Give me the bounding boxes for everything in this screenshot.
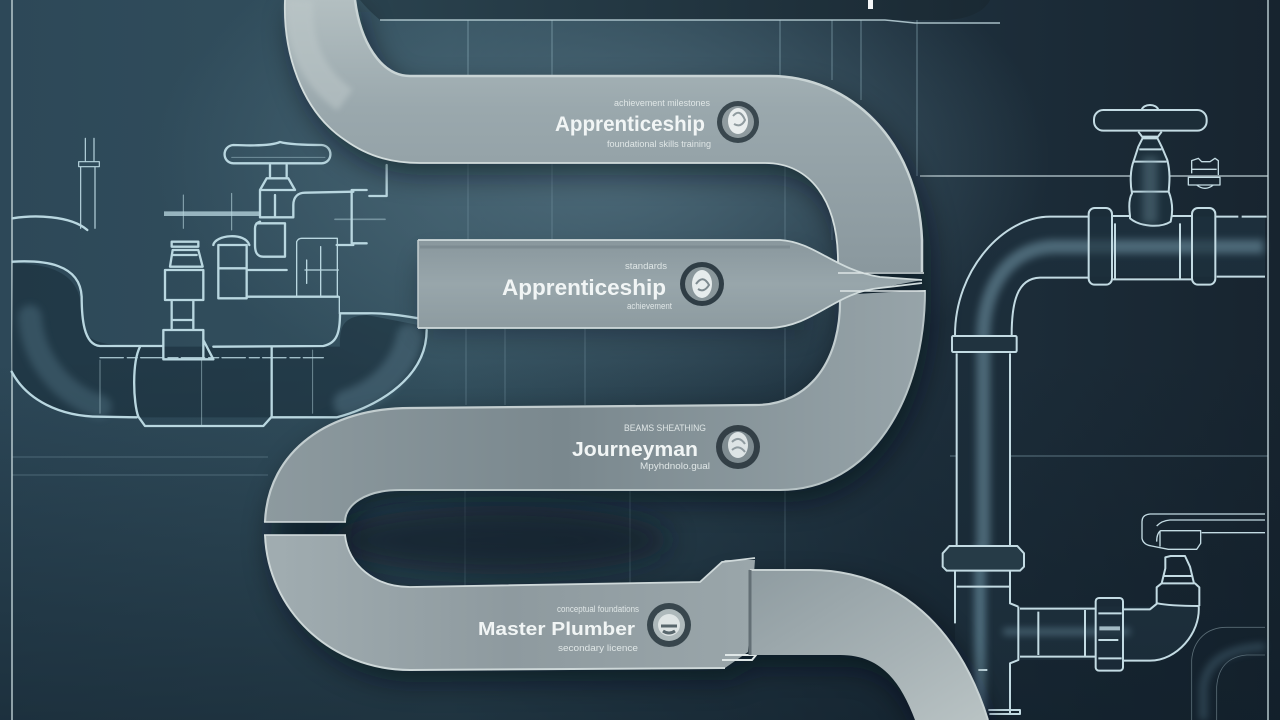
stage 3 label xyxy=(572,423,710,471)
sketch box xyxy=(213,236,338,298)
stage 3 label: Mpyhdnolo.gual xyxy=(640,461,710,471)
main pipe: segment 1 xyxy=(285,0,922,272)
stage 4 label xyxy=(478,604,639,653)
stage 3 icon xyxy=(716,425,760,469)
main pipe: segment 3 xyxy=(265,290,925,522)
stage 2 icon xyxy=(680,262,724,306)
stage 1 label: Apprenticeship xyxy=(555,113,705,136)
sketch pipe shading xyxy=(12,263,427,417)
stage 4 icon xyxy=(647,603,691,647)
valve handle xyxy=(1094,110,1207,131)
blueprint pipes: lower right drain assembly xyxy=(943,514,1265,720)
sketch handle xyxy=(225,142,353,217)
sketch crossbar xyxy=(164,207,260,221)
elbow xyxy=(1123,603,1199,661)
faded lower pipe xyxy=(1192,627,1265,720)
sketch valve stack xyxy=(163,242,213,359)
collar xyxy=(943,546,1024,571)
stage 4 label: secondary licence xyxy=(558,643,638,653)
side fitting xyxy=(1188,158,1220,188)
pipe drop shadow xyxy=(271,12,994,720)
stage 2 label: Apprenticeship xyxy=(502,275,666,300)
top edge tick xyxy=(868,0,873,9)
stage 3 label: BEAMS SHEATHING xyxy=(624,423,706,433)
stage 3 label: Journeyman xyxy=(572,439,698,461)
valve body xyxy=(1129,137,1172,226)
union nut xyxy=(1096,598,1123,671)
blueprint sketch: left plumbing outline xyxy=(12,138,427,426)
collar xyxy=(952,336,1017,352)
joint: left xyxy=(264,522,346,535)
stage 1 label: achievement milestones xyxy=(614,98,710,108)
main pipe: segment 2 xyxy=(418,240,922,328)
stage 2 label xyxy=(502,261,672,311)
stage 2 label: standards xyxy=(625,261,668,271)
stage 1 label: foundational skills training xyxy=(607,139,711,149)
stage 4 label: Master Plumber xyxy=(478,619,635,639)
stage 2 label: achievement xyxy=(627,301,672,311)
stage 4 label: conceptual foundations xyxy=(557,604,639,614)
blueprint pipes: upper right valve assembly xyxy=(952,105,1267,550)
main pipe: segment 5 xyxy=(750,570,988,720)
flange right xyxy=(1192,208,1215,285)
sketch vent stub xyxy=(79,138,99,228)
valve stem xyxy=(1157,556,1199,606)
top tap xyxy=(1142,514,1265,549)
stage 1 icon xyxy=(717,101,759,143)
flange left xyxy=(1089,208,1112,285)
joint: right xyxy=(838,273,925,291)
stage 1 label xyxy=(555,98,711,149)
main pipe: segment 4 xyxy=(265,535,760,670)
